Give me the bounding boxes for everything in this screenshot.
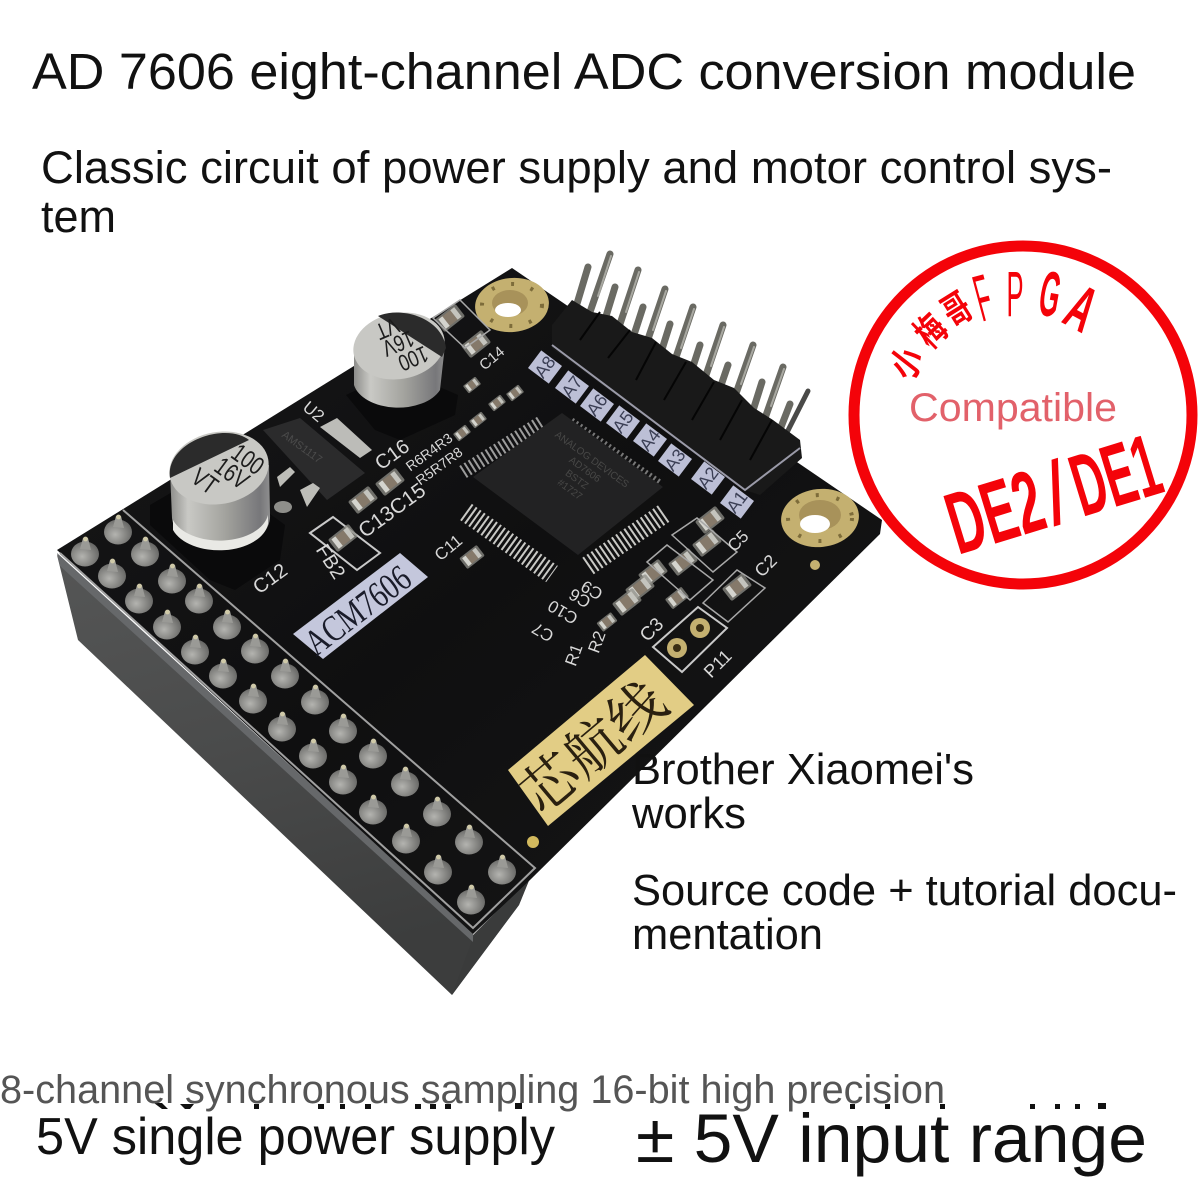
channel labels A1 to A8: A2 bbox=[693, 463, 723, 493]
seal maker text: F bbox=[966, 260, 1000, 336]
capacitor C12: 16V bbox=[209, 451, 255, 495]
capacitor C12: VT bbox=[186, 462, 224, 500]
subtitle bbox=[41, 142, 1112, 242]
seal maker text: 梅 bbox=[907, 306, 955, 356]
seal maker text: 哥 bbox=[935, 285, 979, 335]
caption: source code: Source code + tutorial docu- bbox=[632, 866, 1177, 915]
silkscreen labels: R6R4R3 bbox=[403, 430, 456, 474]
channel labels A1 to A8: A1 bbox=[722, 487, 752, 517]
seal maker text bbox=[883, 258, 1110, 388]
seal maker text: P bbox=[1006, 260, 1024, 330]
feature: power supply: 5V single power supply bbox=[36, 1108, 555, 1166]
capacitor C16: 16V bbox=[378, 325, 418, 361]
silkscreen labels: FB2 bbox=[311, 540, 349, 583]
silkscreen labels: C12 bbox=[249, 559, 292, 599]
regulator U2: AMS1117 bbox=[279, 429, 324, 466]
channel labels A1 to A8: A3 bbox=[660, 445, 690, 475]
pin header bbox=[552, 254, 808, 495]
feature: sampling: 8-channel synchronous sampling 16-bit high precision bbox=[0, 1068, 945, 1112]
connector block underside bbox=[57, 553, 530, 995]
seal ring bbox=[854, 246, 1192, 584]
silkscreen labels bbox=[249, 343, 781, 682]
ADC chip: ANALOG DEVICES bbox=[552, 430, 631, 491]
caption: author: works bbox=[631, 789, 746, 838]
channel labels A1 to A8: A4 bbox=[635, 425, 665, 455]
mounting hole top bbox=[472, 274, 552, 336]
channel labels A1 to A8: A8 bbox=[530, 352, 560, 382]
seal maker text: A bbox=[1054, 270, 1110, 346]
channel labels A1 to A8 bbox=[528, 350, 754, 519]
caption: author bbox=[631, 745, 974, 838]
capacitor base C12 bbox=[150, 470, 285, 590]
silkscreen labels: P11 bbox=[700, 646, 736, 682]
ADC chip bbox=[463, 413, 666, 574]
silkscreen labels: C11 bbox=[431, 531, 466, 565]
capacitor C12: 100 bbox=[226, 438, 270, 480]
ADC chip: AD7606 bbox=[567, 455, 603, 485]
regulator U2 bbox=[263, 418, 372, 513]
capacitor C16 bbox=[348, 306, 450, 408]
silkscreen labels: C13C15 bbox=[354, 479, 430, 543]
silkscreen labels: C16 bbox=[371, 435, 414, 475]
board name label ACM7606: ACM7606 bbox=[297, 558, 419, 664]
silkscreen labels: R5R7R8 bbox=[413, 444, 466, 488]
subtitle: Classic circuit of power supply and motor control sys- bbox=[41, 142, 1112, 193]
silkscreen labels: U2 bbox=[299, 398, 328, 426]
stamp: compatibility seal bbox=[854, 246, 1192, 584]
title: AD 7606 eight-channel ADC conversion module bbox=[32, 43, 1136, 100]
feature: input range: ± 5V input range bbox=[636, 1100, 1147, 1177]
surface mount components bbox=[348, 300, 765, 632]
capacitor base C16 bbox=[346, 370, 458, 440]
silkscreen labels: C14 bbox=[476, 343, 508, 374]
silkscreen labels: R1 bbox=[561, 642, 587, 668]
ADC chip: BSTZ bbox=[563, 468, 590, 492]
silkscreen labels: C2 bbox=[751, 551, 781, 581]
silkscreen labels: C3 bbox=[636, 614, 668, 646]
capacitor C16: VT bbox=[371, 312, 403, 344]
test port P11 bbox=[653, 607, 727, 672]
channel labels A1 to A8: A6 bbox=[582, 390, 612, 420]
silkscreen labels: R2 bbox=[584, 629, 610, 655]
ADC chip: #1727 bbox=[555, 477, 584, 503]
board names: / bbox=[1030, 442, 1083, 544]
seal maker text: 小 bbox=[883, 340, 933, 388]
gold brand label: 芯航线 bbox=[510, 670, 679, 826]
seal maker text: G bbox=[1034, 258, 1066, 332]
subtitle: tem bbox=[41, 191, 116, 242]
capacitor C12 bbox=[164, 424, 274, 550]
caption: source code bbox=[632, 866, 1177, 959]
caption: author: Brother Xiaomei's bbox=[632, 745, 974, 794]
silkscreen labels: C5 bbox=[724, 527, 753, 556]
header solder pins bbox=[71, 515, 516, 914]
capacitor C16: 100 bbox=[394, 340, 432, 376]
residual marks under caption bbox=[154, 1103, 1106, 1109]
mounting hole right bbox=[778, 485, 862, 570]
product photo: ADC module bbox=[57, 254, 882, 995]
silkscreen labels: C7 bbox=[529, 618, 557, 646]
ferrite bead FB2 bbox=[310, 517, 380, 570]
silkscreen labels: C6 bbox=[566, 584, 594, 612]
channel labels A1 to A8: A5 bbox=[608, 407, 638, 437]
caption: source code: mentation bbox=[632, 910, 823, 959]
silkscreen labels: C9 bbox=[578, 576, 606, 604]
board names: DE2 bbox=[935, 450, 1055, 573]
compatible label: Compatible bbox=[909, 386, 1117, 430]
silkscreen labels: C10 bbox=[545, 596, 581, 628]
circuit board bbox=[57, 268, 882, 934]
channel labels A1 to A8: A7 bbox=[557, 372, 587, 402]
